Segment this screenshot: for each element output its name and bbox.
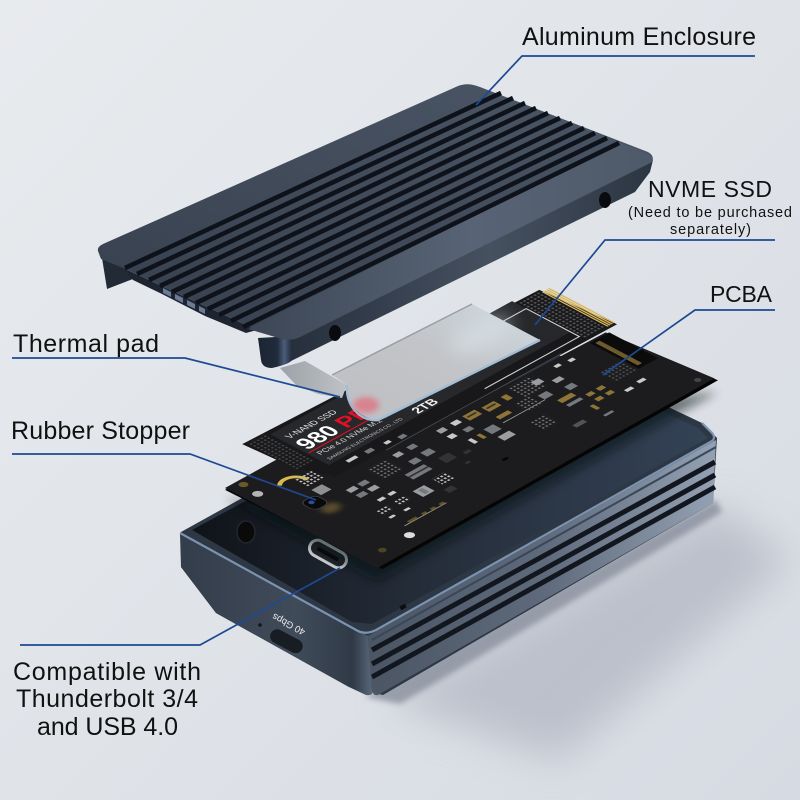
right border line	[432, 309, 579, 389]
label: NVME SSD	[628, 176, 792, 238]
label: compatibility: Compatible with	[13, 658, 201, 686]
enclosure base	[180, 340, 717, 695]
white dot cluster	[295, 471, 324, 486]
board edge	[225, 301, 722, 571]
label: compatibility: and USB 4.0	[37, 713, 178, 741]
small hole	[258, 623, 262, 627]
label: Aluminum Enclosure: Aluminum Enclosure	[522, 23, 756, 51]
lid front strip	[248, 143, 653, 340]
pad curved edge	[347, 340, 540, 420]
leader line: rubber stopper	[12, 454, 316, 500]
label: compatibility: Thunderbolt 3/4	[16, 685, 198, 713]
aluminum heatsink lid	[98, 84, 653, 368]
silkscreen lines	[404, 502, 447, 526]
lid tab	[102, 258, 133, 289]
label: Thermal pad: Thermal pad	[13, 330, 159, 358]
M.2 connector	[590, 332, 658, 369]
lid end block	[258, 336, 293, 368]
maker line: SAMSUNG ELECTRONICS CO., LTD	[326, 417, 406, 461]
side grooves	[372, 462, 715, 677]
enclosure floor	[192, 348, 708, 624]
lid side face	[291, 160, 653, 361]
white pad bottom	[402, 531, 417, 539]
SSD module	[242, 281, 618, 487]
mounting hole top	[236, 481, 251, 488]
lid top surface	[98, 84, 653, 340]
pad highlight	[444, 308, 516, 362]
hole right	[692, 377, 703, 383]
screw hole rear	[599, 192, 611, 208]
lid underside fin ends	[123, 268, 257, 333]
USB-C port	[268, 627, 305, 656]
gold connector fingers	[542, 288, 615, 327]
rubber stopper	[300, 493, 345, 517]
screw hole front	[329, 325, 341, 341]
SSD board	[242, 282, 617, 487]
PCBA with NVMe SSD	[191, 281, 725, 571]
leader line: NVME SSD	[535, 240, 775, 325]
fin end steps	[163, 288, 205, 314]
capacity: 2TB	[407, 397, 442, 415]
contact shadow	[365, 500, 722, 704]
interface line: PCIe 4.0 NVMe M.2	[314, 417, 385, 456]
component cluster center	[416, 368, 602, 469]
label: NVME SSD: separately)	[670, 222, 751, 238]
ground shadow of enclosure	[385, 505, 790, 760]
board	[225, 300, 718, 568]
leader line: compatibility	[20, 568, 340, 645]
enclosure body	[181, 340, 717, 695]
enclosure rim highlight	[180, 423, 714, 633]
hole bottom	[376, 547, 388, 553]
PCB shadow	[225, 392, 718, 582]
gray square chip	[311, 484, 332, 495]
pad top edge	[332, 304, 472, 375]
red underline	[308, 395, 415, 453]
red reflection	[353, 397, 379, 413]
pad back flap	[280, 361, 347, 398]
SSD label	[270, 301, 570, 465]
socket on floor	[237, 521, 255, 543]
label: PCBA: PCBA	[710, 281, 773, 307]
label: NVME SSD: NVME SSD	[648, 176, 772, 202]
internal USB-C plug	[307, 537, 349, 571]
leader line: PCBA	[603, 310, 775, 375]
pad top face	[332, 304, 540, 420]
brand line: V-NAND SSD	[283, 408, 340, 440]
leader line: aluminum enclosure	[476, 56, 755, 105]
notch on floor	[399, 604, 407, 610]
white pad left	[250, 490, 266, 498]
leader line: thermal pad	[12, 358, 340, 397]
thermal pad	[280, 304, 540, 420]
model name: 980 PRO	[289, 395, 395, 453]
enclosure side face	[368, 440, 716, 695]
label: Rubber Stopper: Rubber Stopper	[11, 417, 190, 445]
component cluster right	[441, 346, 663, 467]
label: NVME SSD: (Need to be purchased	[628, 205, 792, 221]
port speed label: 40 Gbps	[270, 610, 307, 637]
label: compatibility	[13, 658, 201, 741]
gold arc	[276, 473, 308, 490]
edge components	[519, 292, 606, 338]
fin grooves	[125, 93, 619, 327]
rim shade	[372, 447, 716, 640]
component cluster left	[314, 429, 494, 526]
enclosure front face	[180, 534, 372, 695]
